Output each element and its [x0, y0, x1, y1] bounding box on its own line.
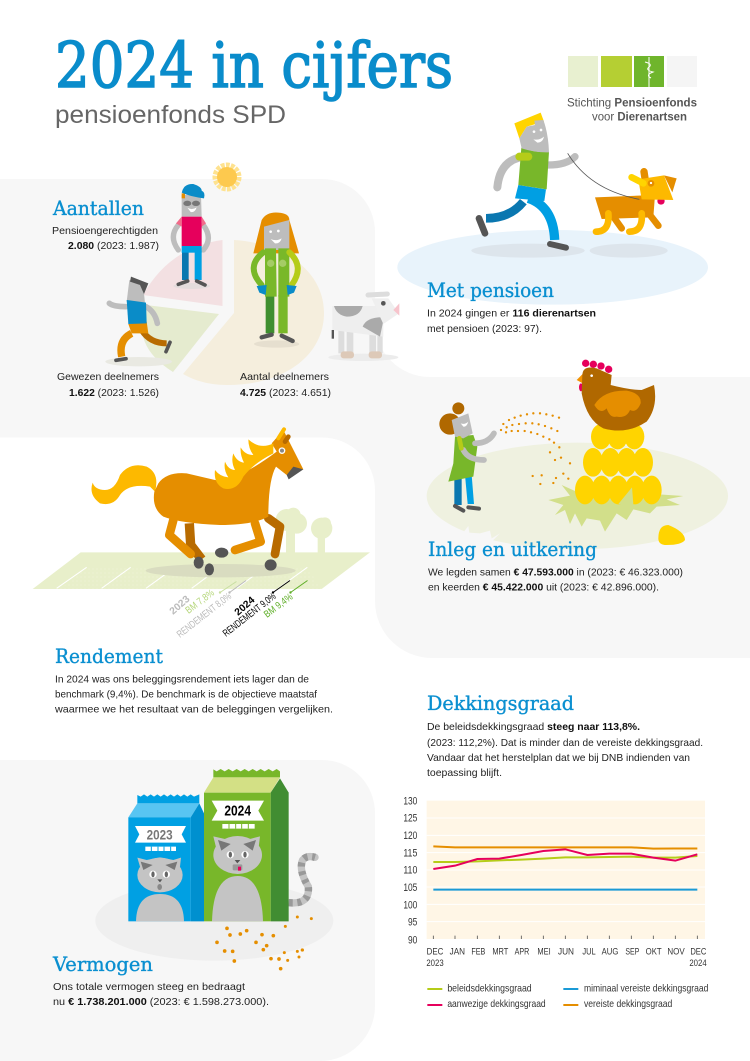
- heading: inleg en uitkering: Inleg en uitkering: [428, 538, 597, 561]
- legend: dekkingsgraad: miminaal vereiste dekkingsgraad: [584, 984, 708, 995]
- panel: rendement: [0, 429, 375, 716]
- illustration: horse on a field: [33, 429, 370, 589]
- line chart: dekkingsgraad: 2023: [426, 958, 444, 968]
- heading: vermogen: Vermogen: [52, 953, 153, 976]
- chart: rendement en benchmark labels: 2024: [233, 595, 258, 618]
- panel: inleg en uitkering: [375, 322, 750, 658]
- illustration: characters on the pie: [105, 184, 299, 366]
- text: rendement: In 2024 was ons beleggingsrendement iets lager dan de: [55, 674, 309, 686]
- label: aantal deelnemers: Aantal deelnemers: [240, 371, 329, 383]
- line chart: dekkingsgraad: SEP: [625, 947, 639, 957]
- title: 2024 in cijfers: [55, 29, 453, 102]
- chart: rendement en benchmark labels: RENDEMENT 9,0%: [221, 591, 278, 639]
- text: rendement: [54, 674, 333, 716]
- panel: aantallen: [0, 166, 399, 490]
- text: inleg en uitkering: en keerden € 45.422.000 uit (2023: € 42.896.000).: [428, 582, 659, 594]
- line chart: dekkingsgraad: 2024: [689, 958, 707, 968]
- label: pensioengerechtigden: [52, 225, 159, 252]
- text: dekkingsgraad: Vandaar dat het herstelplan dat we bij DNB indienden van: [427, 752, 690, 764]
- line chart: dekkingsgraad: 110: [403, 865, 417, 877]
- heading: met pensioen: Met pensioen: [427, 279, 554, 302]
- text: vermogen: [53, 981, 269, 1008]
- illustration: cat food cartons: 2023: [147, 826, 173, 842]
- text: dekkingsgraad: De beleidsdekkingsgraad steeg naar 113,8%.: [427, 721, 640, 733]
- illustration: woman feeding hen on eggs: [427, 360, 728, 550]
- line chart: dekkingsgraad: 95: [408, 917, 417, 929]
- illustration: cow: [328, 294, 399, 361]
- label: pensioengerechtigden: 2.080 (2023: 1.987): [68, 240, 159, 252]
- line chart: dekkingsgraad: DEC: [690, 947, 707, 957]
- chart: rendement en benchmark labels: 2023: [168, 594, 193, 617]
- logo: Stichting Pensioenfonds voor Dierenartsen: Stichting Pensioenfonds: [567, 96, 697, 110]
- icon: sun: [216, 166, 238, 188]
- subtitle: pensioenfonds SPD: [55, 101, 286, 129]
- text: met pensioen: [427, 308, 596, 335]
- label: gewezen deelnemers: Gewezen deelnemers: [57, 371, 159, 383]
- legend: dekkingsgraad: beleidsdekkingsgraad: [447, 984, 532, 995]
- line chart: dekkingsgraad: OKT: [646, 947, 662, 957]
- label: gewezen deelnemers: [57, 371, 159, 399]
- heading: rendement: Rendement: [55, 645, 163, 668]
- legend: dekkingsgraad: aanwezige dekkingsgraad: [447, 999, 546, 1010]
- line chart: dekkingsgraad: 90: [408, 934, 417, 946]
- legend: dekkingsgraad: [427, 984, 708, 1010]
- text: inleg en uitkering: We legden samen € 47.593.000 in (2023: € 46.323.000): [428, 566, 683, 578]
- line chart: dekkingsgraad: 115: [403, 847, 417, 859]
- label: pensioengerechtigden: Pensioengerechtigden: [52, 225, 158, 237]
- line chart: dekkingsgraad: APR: [515, 947, 530, 957]
- line chart: dekkingsgraad: FEB: [471, 947, 485, 957]
- line chart: dekkingsgraad: 120: [403, 830, 417, 842]
- illustration: cat food cartons: 2024: [224, 804, 252, 820]
- text: dekkingsgraad: toepassing blijft.: [427, 767, 502, 779]
- panel: vermogen: [0, 760, 375, 1061]
- line chart: dekkingsgraad: 130: [403, 795, 417, 807]
- text: rendement: waarmee we het resultaat van de beleggingen vergelijken.: [54, 704, 333, 716]
- line chart: dekkingsgraad: JAN: [450, 947, 465, 957]
- heading: dekkingsgraad: Dekkingsgraad: [427, 692, 574, 715]
- line chart: dekkingsgraad: MRT: [492, 947, 509, 957]
- line chart: dekkingsgraad: [403, 795, 707, 968]
- pie chart: deelnemers: [142, 240, 324, 385]
- chart: rendement en benchmark labels: BM 9,4%: [262, 592, 295, 620]
- panel: met pensioen: [397, 113, 708, 335]
- legend: dekkingsgraad: vereiste dekkingsgraad: [584, 999, 672, 1010]
- line chart: dekkingsgraad: NOV: [667, 947, 685, 957]
- text: rendement: benchmark (9,4%). De benchmark is de objectieve maatstaf: [55, 688, 317, 700]
- line chart: dekkingsgraad: 125: [403, 813, 417, 825]
- label: aantal deelnemers: 4.725 (2023: 4.651): [240, 387, 331, 399]
- chart: rendement en benchmark labels: [168, 580, 308, 640]
- text: met pensioen: In 2024 gingen er 116 dierenartsen: [427, 308, 596, 320]
- illustration: cat food cartons: [95, 769, 333, 970]
- line chart: dekkingsgraad: DEC: [427, 947, 444, 957]
- label: gewezen deelnemers: 1.622 (2023: 1.526): [69, 387, 159, 399]
- text: inleg en uitkering: [428, 566, 683, 594]
- text: met pensioen: met pensioen (2023: 97).: [427, 323, 542, 335]
- logo: Stichting Pensioenfonds voor Dierenartsen: voor Dierenartsen: [592, 110, 687, 124]
- logo: Stichting Pensioenfonds voor Dierenartsen: [567, 56, 697, 124]
- text: dekkingsgraad: [427, 721, 703, 779]
- text: vermogen: Ons totale vermogen steeg en bedraagt: [53, 981, 245, 993]
- chart: rendement en benchmark labels: BM 7,8%: [184, 588, 217, 616]
- line chart: dekkingsgraad: AUG: [602, 947, 618, 957]
- chart: rendement en benchmark labels: RENDEMENT 8,0%: [175, 591, 234, 640]
- text: vermogen: nu € 1.738.201.000 (2023: € 1.598.273.000).: [53, 996, 269, 1008]
- label: aantal deelnemers: [240, 371, 331, 399]
- illustration: man walking a dog: [397, 113, 708, 305]
- text: dekkingsgraad: (2023: 112,2%). Dat is minder dan de vereiste dekkingsgraad.: [427, 737, 703, 749]
- line chart: dekkingsgraad: JUL: [582, 947, 596, 957]
- line chart: dekkingsgraad: 105: [403, 882, 417, 894]
- heading: aantallen: Aantallen: [52, 197, 144, 220]
- panel: dekkingsgraad: [403, 692, 708, 1010]
- line chart: dekkingsgraad: MEI: [537, 947, 551, 957]
- line chart: dekkingsgraad: 100: [403, 899, 417, 911]
- line chart: dekkingsgraad: JUN: [558, 947, 574, 957]
